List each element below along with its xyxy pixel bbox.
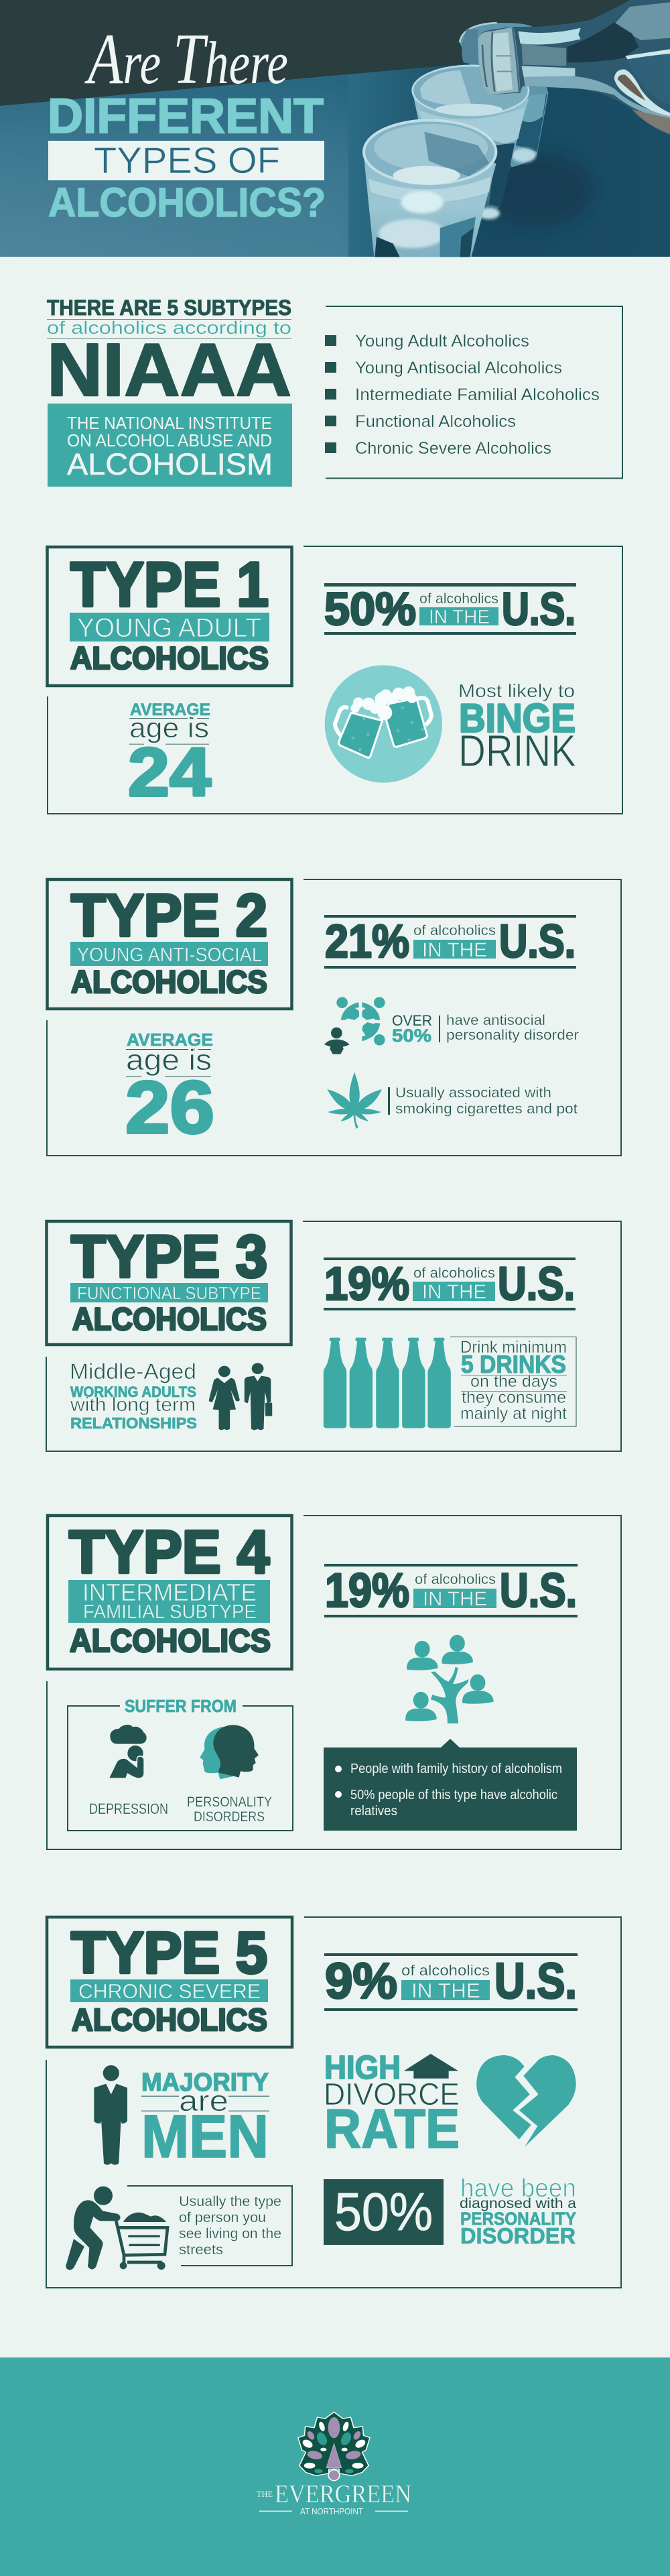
text: average age [125, 1030, 214, 1149]
stat: 9 percent in the US [324, 1953, 578, 2011]
stat: 21 percent in the US: 21% [325, 915, 409, 967]
stat: 19 percent in the US: 19% [325, 1565, 409, 1617]
icon: working woman and man [209, 1363, 272, 1430]
text: antisocial personality disorder: have antisocial [446, 1013, 545, 1028]
hero banner [0, 0, 670, 257]
icon: up arrow house [404, 2054, 458, 2079]
text: majority are men: MEN [141, 2103, 269, 2170]
icon: family tree [405, 1635, 494, 1723]
heading: type 5 box: ALCOHOLICS [72, 2002, 267, 2037]
title: Are There [84, 19, 288, 99]
text: average age [128, 700, 211, 810]
panel: type 1 [47, 546, 622, 814]
panel: suffer from [68, 1696, 293, 1831]
text: middle-aged working adults: RELATIONSHIPS [70, 1414, 197, 1432]
icon: man in suit [94, 2065, 127, 2165]
text: binge drink: Most likely to [458, 680, 575, 701]
text: antisocial personality disorder: personality disorder [446, 1028, 579, 1043]
text: personality disorder diagnosis: have been [460, 2174, 576, 2203]
list: five subtypes: Young Adult Alcoholics [355, 332, 529, 351]
stat: 50 percent in the US: 50% [324, 583, 416, 635]
heading: type 4 box: INTERMEDIATE [82, 1579, 257, 1606]
callout: 50 percent: 50% [334, 2182, 433, 2242]
stat: 21 percent in the US: U.S. [499, 915, 576, 967]
text: five drinks [450, 1337, 576, 1426]
callout: institute name [48, 404, 292, 487]
text: living on the streets [127, 2186, 292, 2266]
stat: 19 percent in the US [324, 1258, 576, 1310]
title [48, 19, 326, 225]
title: TYPES OF [94, 139, 280, 181]
stat: 9 percent in the US: U.S. [494, 1953, 577, 2009]
text: depression label: DEPRESSION [89, 1800, 168, 1817]
text: personality disorder diagnosis: PERSONALITY [460, 2209, 576, 2229]
text: middle-aged working adults: with long term [70, 1394, 196, 1416]
text: smoking association: smoking cigarettes and pot [395, 1101, 578, 1117]
callout: institute name: THE NATIONAL INSTITUTE [67, 413, 272, 433]
callout: family history: 50% people of this type have alcoholic [350, 1788, 557, 1802]
icon: group with isolated person [324, 997, 385, 1054]
heading: type 4 box: FAMILIAL SUBTYPE [83, 1601, 257, 1623]
stat: 21 percent in the US: of alcoholics [413, 923, 496, 938]
text: average age: 26 [125, 1066, 214, 1149]
icon: two-faced heads [200, 1725, 259, 1779]
icon: broken heart [476, 2055, 576, 2147]
text: living on the streets: Usually the type [179, 2194, 281, 2209]
text: high divorce rate: RATE [324, 2097, 460, 2160]
stat: 19 percent in the US: U.S. [500, 1565, 577, 1617]
text: personality disorder diagnosis: diagnosed with a [460, 2196, 576, 2211]
footer band [0, 2357, 670, 2576]
text: binge drink: DRINK [458, 726, 576, 776]
photo: shot glasses and bottle [364, 0, 670, 257]
text: five drinks: Drink minimum [460, 1338, 567, 1357]
text: five drinks: 5 DRINKS [461, 1351, 566, 1378]
callout: family history: relatives [350, 1804, 397, 1819]
text: majority are men: MAJORITY [141, 2069, 269, 2097]
text: average age: 24 [128, 734, 211, 810]
stat: 21 percent in the US: IN THE [422, 939, 487, 961]
list: five subtypes: Chronic Severe Alcoholics [355, 439, 551, 458]
heading: type 5 box: TYPE 5 [71, 1920, 267, 1985]
text: middle-aged working adults [70, 1359, 197, 1432]
logo: wordmark [257, 2480, 411, 2516]
stat: 50 percent in the US: IN THE [429, 607, 490, 628]
heading: type 1 box: TYPE 1 [70, 549, 269, 619]
panel: NIAAA intro [47, 296, 622, 487]
stat: 21 percent in the US [324, 915, 576, 969]
title: ALCOHOLICS? [48, 180, 326, 225]
text: binge drink: BINGE [459, 696, 576, 741]
text: high divorce rate: DIVORCE [324, 2077, 460, 2111]
list: five subtypes: Functional Alcoholics [355, 412, 516, 431]
text: majority are men [141, 2069, 269, 2170]
icon: depression [109, 1725, 147, 1778]
heading: type 2 box: ALCOHOLICS [71, 964, 267, 999]
stat: 19 percent in the US: of alcoholics [415, 1572, 496, 1587]
text: living on the streets: of person you [179, 2210, 266, 2225]
text: five drinks: mainly at night [460, 1404, 567, 1423]
text: personality disorders label [187, 1794, 272, 1825]
heading: type 3 box: TYPE 3 [71, 1223, 267, 1290]
heading: type 4 box [48, 1516, 292, 1669]
logo: wordmark: THE [257, 2489, 273, 2499]
text: smoking association [388, 1085, 578, 1117]
heading: subtypes: THERE ARE 5 SUBTYPES [47, 296, 291, 320]
heading: suffer from: SUFFER FROM [125, 1696, 237, 1716]
text: smoking association: Usually associated with [395, 1085, 551, 1101]
text: personality disorder diagnosis [460, 2174, 576, 2248]
panel: type 3 [46, 1221, 621, 1451]
logo: peacock emblem [298, 2412, 370, 2481]
callout: family history: People with family history of alcoholism [350, 1762, 562, 1776]
heading: type 4 box: ALCOHOLICS [70, 1623, 271, 1659]
text: five drinks: they consume [462, 1388, 566, 1407]
icon: person pushing cart [66, 2187, 168, 2270]
stat: 9 percent in the US: of alcoholics [401, 1962, 490, 1979]
icon: clinking beer mugs [325, 665, 442, 783]
text: average age: AVERAGE [130, 700, 210, 719]
heading: type 4 box: TYPE 4 [69, 1519, 269, 1586]
text: antisocial personality disorder [392, 1012, 579, 1046]
heading: type 3 box: FUNCTIONAL SUBTYPE [77, 1283, 261, 1303]
logo: wordmark: AT NORTHPOINT [300, 2506, 363, 2516]
heading: NIAAA: NIAAA [47, 328, 291, 412]
heading: type 3 box [47, 1221, 291, 1345]
text: personality disorders label: PERSONALITY [187, 1794, 272, 1810]
stat: 19 percent in the US: IN THE [422, 1281, 486, 1303]
title: DIFFERENT [48, 89, 324, 143]
text: living on the streets: streets [179, 2242, 223, 2258]
heading: type 3 box: ALCOHOLICS [72, 1301, 267, 1337]
heading: type 1 box [47, 547, 292, 686]
text: average age: AVERAGE [127, 1030, 213, 1050]
callout: family history [324, 1739, 577, 1831]
heading: according to: of alcoholics according to [47, 318, 291, 338]
back glass [460, 23, 548, 167]
stat: 19 percent in the US [324, 1564, 578, 1617]
heading: type 2 box: TYPE 2 [71, 881, 267, 948]
heading: type 2 box: YOUNG ANTI-SOCIAL [77, 944, 262, 966]
list: five subtypes: Young Antisocial Alcoholics [355, 359, 562, 377]
heading: type 5 box [47, 1917, 292, 2047]
bottle [478, 0, 670, 135]
stat: 19 percent in the US: U.S. [498, 1258, 575, 1310]
heading: type 2 box [47, 879, 292, 1009]
text: personality disorders label: DISORDERS [194, 1809, 265, 1825]
stat: 9 percent in the US: IN THE [411, 1979, 480, 2002]
text: five drinks: on the days [470, 1372, 557, 1391]
logo: wordmark: EVERGREEN [275, 2480, 411, 2508]
text: middle-aged working adults: WORKING ADULTS [70, 1384, 196, 1400]
callout: institute name: ALCOHOLISM [67, 447, 273, 481]
panel: type 4 [47, 1516, 621, 1849]
text: antisocial personality disorder: OVER [392, 1012, 432, 1029]
callout: institute name: ON ALCOHOL ABUSE AND [67, 430, 272, 450]
panel: type 5 [46, 1917, 621, 2288]
text: personality disorder diagnosis: DISORDER [460, 2223, 576, 2248]
stat: 9 percent in the US: 9% [325, 1953, 397, 2009]
stat: 50 percent in the US [324, 583, 576, 635]
text: middle-aged working adults: Middle-Aged [70, 1359, 196, 1384]
text: living on the streets: see living on the [179, 2226, 281, 2242]
stat: 19 percent in the US: IN THE [423, 1588, 487, 1610]
heading: type 1 box: YOUNG ADULT [77, 613, 261, 643]
list: five subtypes: Intermediate Familial Alcoholics [355, 385, 600, 404]
icon: cannabis leaf [327, 1072, 382, 1129]
heading: type 1 box: ALCOHOLICS [70, 640, 269, 676]
middle glass [412, 90, 529, 220]
text: binge drink [458, 680, 576, 776]
text: high divorce rate: HIGH [324, 2050, 401, 2086]
panel: type 2 [47, 879, 621, 1156]
front glass [364, 154, 496, 257]
icon: five bottles [324, 1338, 451, 1428]
stat: 19 percent in the US: of alcoholics [413, 1266, 495, 1281]
text: majority are men: are [179, 2085, 228, 2118]
stat: 19 percent in the US: 19% [324, 1258, 409, 1310]
list: five subtypes [325, 306, 622, 479]
text: average age: age is [126, 1044, 212, 1077]
stat: 50 percent in the US: U.S. [502, 583, 576, 635]
text: high divorce rate [324, 2050, 460, 2160]
stat: 50 percent in the US: of alcoholics [419, 591, 498, 607]
text: antisocial personality disorder: 50% [392, 1026, 431, 1046]
text: average age: age is [129, 712, 209, 743]
heading: type 5 box: CHRONIC SEVERE [78, 1979, 261, 2003]
